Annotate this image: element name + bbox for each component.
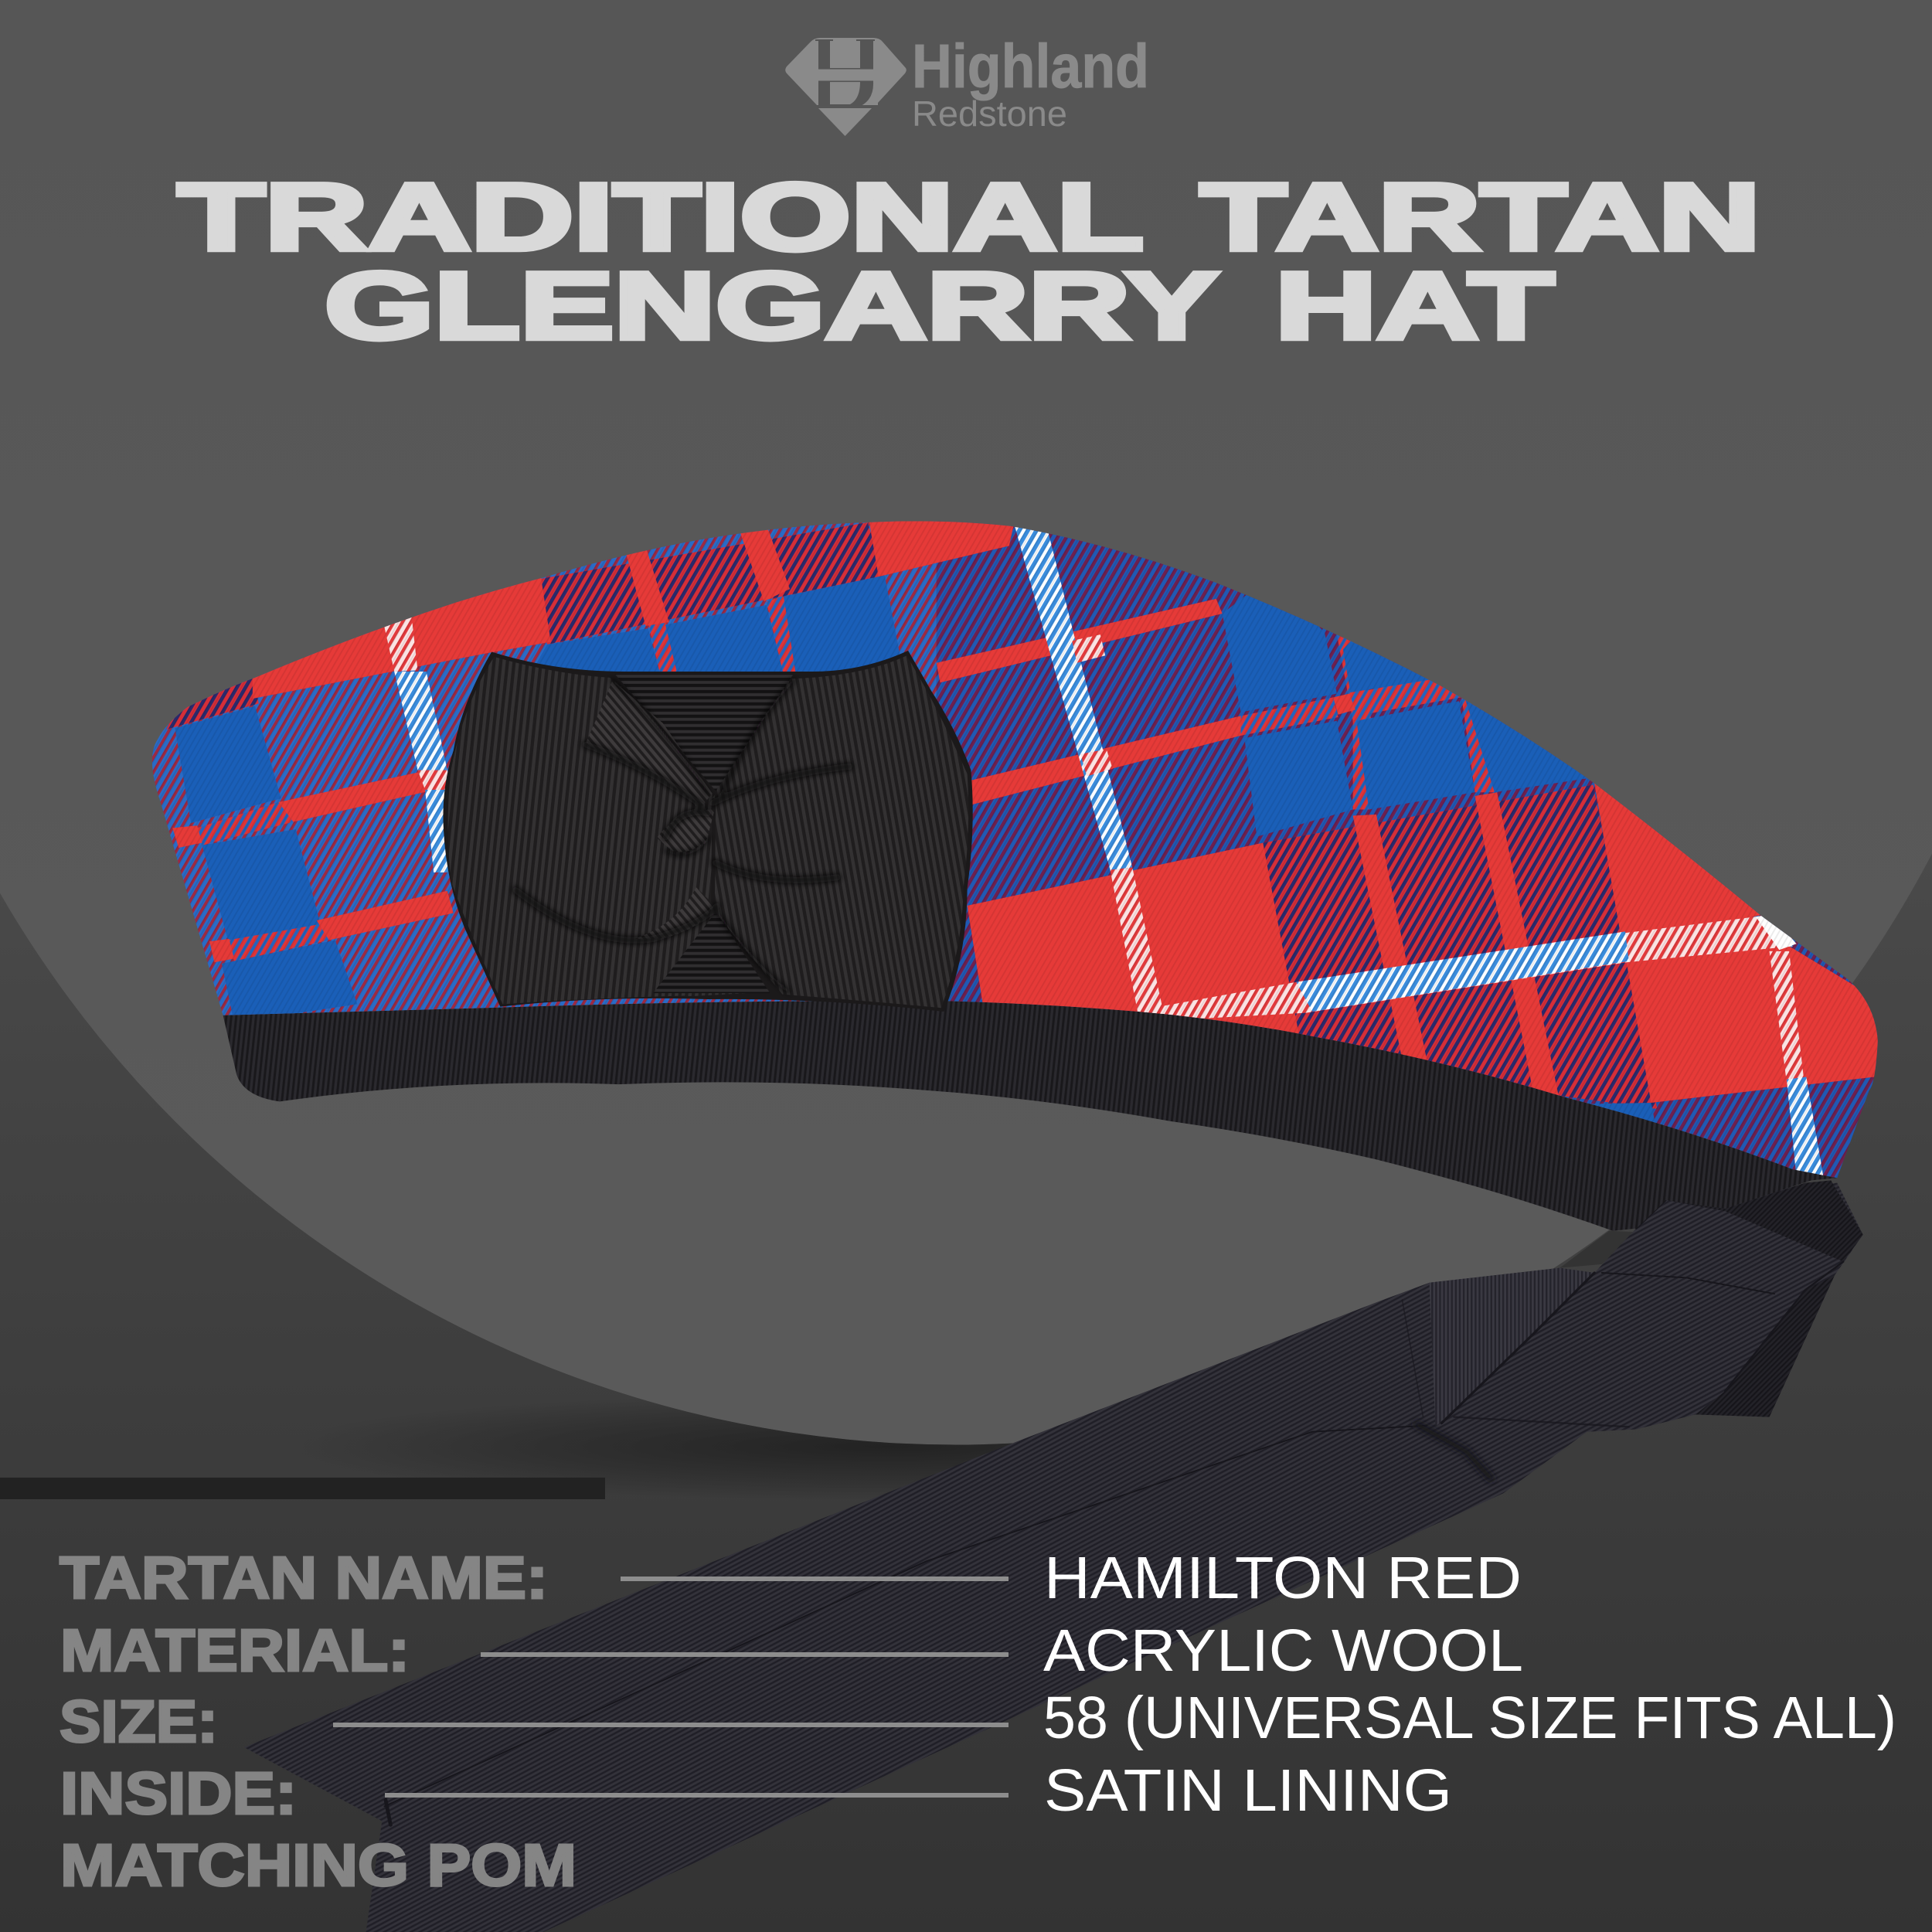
tartan: blue squares: [175, 576, 1657, 1134]
label: inside: INSIDE:: [60, 1760, 297, 1827]
label: matching pom: MATCHING POM: [60, 1832, 577, 1899]
tartan: crossing hatches: [197, 597, 1495, 961]
label: tartan name: TARTAN NAME:: [60, 1545, 548, 1611]
logo: [785, 32, 1149, 136]
title: HAT: [1275, 253, 1554, 359]
value: size: 58 (UNIVERSAL SIZE FITS ALL): [1043, 1685, 1896, 1751]
value: satin lining: SATIN LINING: [1044, 1757, 1452, 1824]
ribbon tails: [244, 1180, 1863, 1932]
label: material: MATERIAL:: [60, 1617, 410, 1684]
spec labels: [60, 1545, 577, 1899]
ribbon: pinched fold: [1430, 1268, 1594, 1427]
logo icon: diamond monogram: [785, 38, 906, 136]
tartan: horizontal white band: [1138, 914, 1797, 1020]
tartan: vertical white and blue stripes: [382, 524, 1824, 1178]
bow: knot and shadows: [515, 680, 875, 992]
spec values: [1043, 1545, 1896, 1824]
ribbon: dark back tail: [1696, 1275, 1835, 1417]
background: [0, 855, 1932, 1932]
tartan crown: [151, 521, 1878, 1178]
label: size: SIZE:: [60, 1689, 218, 1755]
logo text: Redstone: Redstone: [912, 94, 1067, 134]
bow: right wing: [715, 655, 968, 1008]
hat band: [223, 1001, 1837, 1231]
bow: left wing: [448, 657, 767, 1004]
ribbon: knot: [1666, 1180, 1863, 1262]
title: GLENGARRY: [325, 253, 1219, 359]
tartan: hatched red areas: [166, 522, 1657, 1109]
title: [178, 165, 1760, 359]
bow: bottom centre ribbed strip: [653, 912, 770, 993]
dark bar: [0, 1478, 605, 1499]
logo text: Highland: Highland: [912, 32, 1149, 100]
tartan: red areas and stripes: [172, 512, 1885, 1103]
bow: [443, 651, 973, 1012]
value: acrylic wool: ACRYLIC WOOL: [1043, 1617, 1523, 1684]
bow: top centre ribbed strip: [615, 674, 794, 791]
title: TRADITIONAL: [178, 165, 1144, 270]
connector lines: [333, 1577, 1009, 1798]
value: hamilton red: HAMILTON RED: [1044, 1545, 1522, 1611]
hat illustration: [123, 493, 1897, 1932]
bow: fold highlights: [585, 680, 713, 806]
title: TARTAN: [1200, 165, 1760, 270]
